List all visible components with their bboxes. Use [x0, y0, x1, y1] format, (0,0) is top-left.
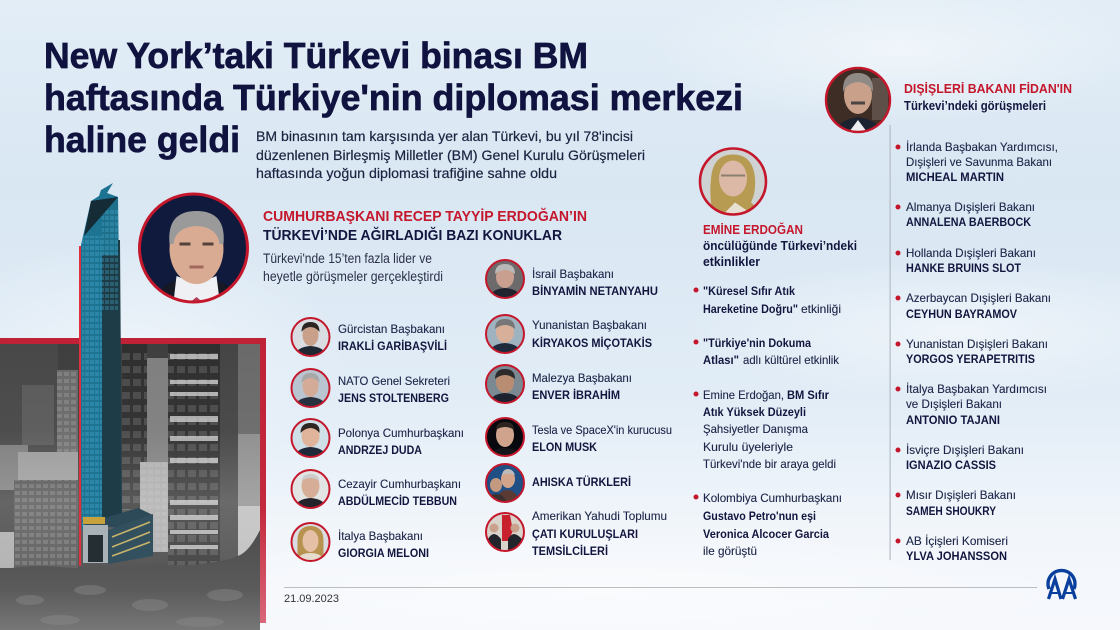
- intro text: [256, 128, 645, 181]
- panel: Emine Erdoğan events: etkinlikler: [703, 254, 760, 269]
- event 1: "Küresel Sıfır Atık: [703, 284, 795, 298]
- meeting: Shoukry: Mısır Dışişleri Bakanı: [906, 488, 1016, 502]
- meeting: Cassis: [896, 443, 1024, 472]
- president portrait: [140, 194, 248, 302]
- guest: Yahudi toplumu: ÇATI KURULUŞLARI: [532, 527, 638, 541]
- guest: Garibaşvili: Gürcistan Başbakanı: [338, 322, 445, 336]
- guest: Netanyahu: [486, 260, 658, 298]
- title: haline geldi: [44, 119, 240, 160]
- guest: İbrahim: [486, 365, 632, 403]
- meeting: Martin: İrlanda Başbakan Yardımcısı,: [906, 140, 1058, 154]
- event 3: [694, 388, 836, 471]
- meeting: Yerapetritis: Yunanistan Dışişleri Bakanı: [906, 337, 1048, 351]
- tower: [79, 183, 153, 566]
- meeting: Baerbock: [896, 200, 1035, 229]
- guest: Tebbun: Cezayir Cumhurbaşkanı: [338, 477, 461, 491]
- intro text: düzenlenen Birleşmiş Milletler (BM) Genel Kurulu Görüşmeleri: [256, 147, 645, 163]
- guest: Meloni: GIORGIA MELONI: [338, 546, 429, 560]
- meeting: Slot: HANKE BRUINS SLOT: [906, 261, 1022, 275]
- panel: Fidan meetings: [896, 81, 1072, 563]
- guest: Meloni: İtalya Başbakanı: [338, 529, 423, 543]
- event 3: Emine Erdoğan,: [703, 388, 784, 402]
- panel: Emine Erdoğan events: [694, 222, 857, 558]
- guest: Garibaşvili: [292, 318, 447, 356]
- panel: Fidan meetings: DIŞİŞLERİ BAKANI FİDAN'IN: [904, 81, 1072, 96]
- guest: İbrahim: ENVER İBRAHİM: [532, 387, 620, 402]
- event 4: Kolombiya Cumhurbaşkanı: [703, 491, 842, 505]
- event 4: Gustavo Petro'nun eşi: [703, 509, 816, 523]
- event 3: Türkevi'nde bir araya geldi: [703, 457, 836, 471]
- meeting: Shoukry: SAMEH SHOUKRY: [906, 504, 996, 518]
- event 1: Hareketine Doğru": [703, 302, 798, 316]
- guest: Miçotakis: [486, 315, 652, 353]
- event 1: etkinliği: [801, 302, 841, 316]
- meeting: Tajani: İtalya Başbakan Yardımcısı: [906, 382, 1047, 396]
- meeting: Tajani: ANTONIO TAJANI: [906, 413, 1000, 427]
- meeting: Johansson: [896, 534, 1008, 563]
- event 4: [694, 491, 842, 558]
- guest: Netanyahu: BİNYAMİN NETANYAHU: [532, 283, 658, 298]
- meeting: Martin: MICHEAL MARTIN: [906, 170, 1004, 184]
- meeting: Bayramov: CEYHUN BAYRAMOV: [906, 307, 1017, 321]
- panel: Fidan meetings: Türkevi’ndeki görüşmeleri: [904, 98, 1046, 113]
- meeting: Tajani: [896, 382, 1047, 427]
- guest: Duda: [292, 419, 464, 457]
- event 1: [694, 284, 841, 316]
- guest: Miçotakis: Yunanistan Başbakanı: [532, 318, 647, 332]
- event 4: Veronica Alcocer Garcia: [703, 527, 829, 541]
- event 2: [694, 336, 840, 367]
- meeting: Baerbock: ANNALENA BAERBOCK: [906, 215, 1031, 229]
- red frame: [0, 338, 266, 623]
- panel: Emine Erdoğan events: öncülüğünde Türkevi’ndeki: [703, 238, 857, 253]
- meeting: Johansson: YLVA JOHANSSON: [906, 549, 1007, 563]
- meeting: Slot: Hollanda Dışişleri Bakanı: [906, 246, 1036, 260]
- meeting: Yerapetritis: [896, 337, 1048, 366]
- guest: Ahıska Türkleri: [486, 464, 631, 502]
- panel heading: president guests: CUMHURBAŞKANI RECEP TAYYİP ERDOĞAN’IN: [263, 207, 587, 225]
- guest: Miçotakis: KİRYAKOS MİÇOTAKİS: [532, 335, 652, 350]
- guest: Tebbun: [292, 470, 461, 508]
- title: haftasında Türkiye'nin diplomasi merkezi: [44, 77, 743, 118]
- meeting: Cassis: IGNAZIO CASSIS: [906, 458, 996, 472]
- event 2: "Türkiye'nin Dokuma: [703, 336, 811, 350]
- Emine Erdoğan portrait: [700, 148, 766, 214]
- trees: [0, 530, 260, 630]
- guest: Stoltenberg: [292, 369, 450, 407]
- panel: Emine Erdoğan events: EMİNE ERDOĞAN: [703, 222, 803, 237]
- event 3: Atık Yüksek Düzeyli: [703, 405, 806, 419]
- event 4: ile görüştü: [703, 544, 757, 558]
- meeting: Tajani: ve Dışişleri Bakanı: [906, 397, 1002, 411]
- event 2: Atlası": [703, 353, 739, 367]
- guest: Garibaşvili: IRAKLİ GARİBAŞVİLİ: [338, 338, 447, 353]
- event 2: adlı kültürel etkinlik: [743, 353, 840, 367]
- lit windows: [170, 354, 218, 549]
- panel heading: president guests: heyetle görüşmeler gerçekleştirdi: [263, 269, 443, 284]
- meeting: Yerapetritis: YORGOS YERAPETRITIS: [906, 352, 1035, 366]
- guest: İbrahim: Malezya Başbakanı: [532, 371, 632, 385]
- meeting: Johansson: AB İçişleri Komiseri: [906, 534, 1008, 548]
- intro text: haftasında yoğun diplomasi trafiğine sahne oldu: [256, 165, 557, 181]
- footer rule: [284, 587, 1037, 588]
- meeting: Bayramov: [896, 291, 1051, 321]
- meeting: Martin: Dışişleri ve Savunma Bakanı: [906, 155, 1052, 169]
- guest: Netanyahu: İsrail Başbakanı: [532, 267, 614, 281]
- event 3: Kurulu üyeleriyle: [703, 440, 793, 454]
- meeting: Shoukry: [896, 488, 1016, 518]
- event 3: Şahsiyetler Danışma: [703, 422, 808, 436]
- event 3: BM Sıfır: [787, 388, 829, 402]
- meeting: Baerbock: Almanya Dışişleri Bakanı: [906, 200, 1035, 214]
- icon: AA logo: [1048, 570, 1076, 599]
- date: 21.09.2023: [284, 593, 339, 605]
- guest: Musk: Tesla ve SpaceX'in kurucusu: [532, 423, 672, 437]
- guest: Yahudi toplumu: TEMSİLCİLERİ: [532, 543, 608, 558]
- intro text: BM binasının tam karşısında yer alan Türkevi, bu yıl 78'incisi: [256, 128, 633, 144]
- panel heading: president guests: [263, 207, 587, 284]
- panel heading: president guests: Türkevi'nde 15’ten fazla lider ve: [263, 251, 432, 266]
- Fidan portrait: [826, 68, 890, 132]
- guest: Tebbun: ABDÜLMECİD TEBBUN: [338, 493, 457, 508]
- meeting: Martin: [896, 140, 1058, 184]
- meeting: Slot: [896, 246, 1036, 275]
- guest: Musk: [486, 418, 672, 456]
- divider line: Fidan list: [890, 125, 891, 560]
- guest: Yahudi toplumu: [485, 512, 666, 555]
- panel heading: president guests: TÜRKEVİ’NDE AĞIRLADIĞI BAZI KONUKLAR: [263, 226, 562, 244]
- title: [44, 35, 743, 160]
- guest: Stoltenberg: NATO Genel Sekreteri: [338, 374, 450, 388]
- guest: Stoltenberg: JENS STOLTENBERG: [338, 391, 449, 405]
- cityscape photo with red frame and tower: [0, 183, 266, 630]
- guest: Yahudi toplumu: Amerikan Yahudi Toplumu: [532, 509, 667, 523]
- meeting: Cassis: İsviçre Dışişleri Bakanı: [906, 443, 1024, 457]
- grayscale city: [0, 344, 260, 630]
- guest: Duda: ANDRZEJ DUDA: [338, 443, 422, 457]
- title: New York’taki Türkevi binası BM: [44, 35, 588, 76]
- guest: Ahıska Türkleri: AHISKA TÜRKLERİ: [532, 474, 631, 489]
- meeting: Bayramov: Azerbaycan Dışişleri Bakanı: [906, 291, 1051, 305]
- guest: Duda: Polonya Cumhurbaşkanı: [338, 426, 464, 440]
- guest: Meloni: [292, 523, 429, 561]
- guest: Musk: ELON MUSK: [532, 440, 597, 454]
